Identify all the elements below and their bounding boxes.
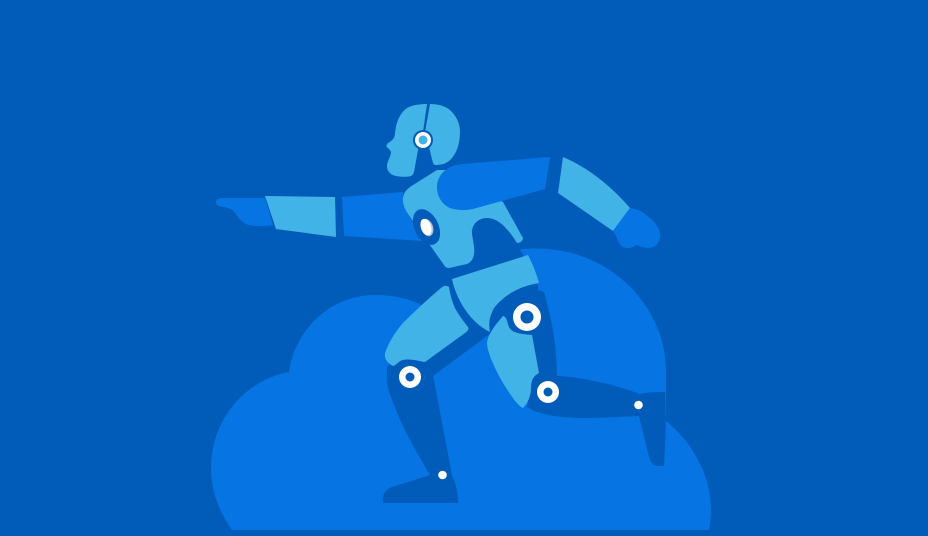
head: back [425,104,460,165]
rear upper arm [437,157,550,210]
front upper arm [342,192,423,241]
rear forearm [558,157,630,231]
rear ankle dot [634,401,643,409]
rear hand [613,208,660,248]
torso [403,170,523,268]
cloud [211,249,711,530]
front ankle dot [438,471,447,479]
ear ring [413,130,433,150]
shoulder joint [418,217,436,238]
robot figure [216,104,666,503]
hip joint [513,303,541,331]
head: face [386,104,427,177]
rear leg: upper leg [489,284,557,390]
rear leg: lower leg and foot [527,375,666,466]
front leg: thigh plate [385,286,468,366]
front leg: lower leg and foot [383,360,458,503]
pointing hand [216,198,273,226]
front knee joint [399,366,421,388]
rear knee joint [537,381,559,403]
rear leg: thigh plate [487,316,539,408]
pelvis [452,255,539,332]
shoulder socket [407,205,446,249]
front forearm [265,196,336,237]
hip connector [420,287,491,376]
